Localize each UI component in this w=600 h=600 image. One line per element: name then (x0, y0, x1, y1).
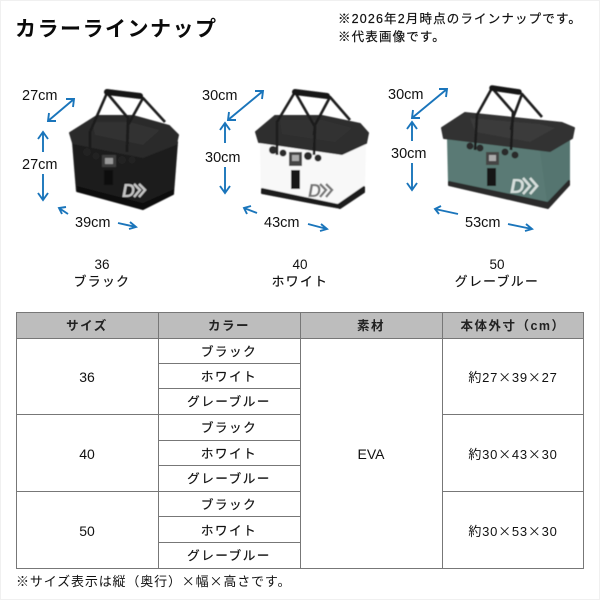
size column: 36 (79, 369, 95, 385)
bag: 50 grey-blue: D (510, 176, 524, 198)
dimension labels: 30cm (205, 150, 240, 166)
arrows: 36 dimensions (38, 99, 136, 229)
dimension labels: 27cm (22, 157, 57, 173)
dimensions column: 約30×53×30 (468, 521, 558, 540)
color column (187, 344, 271, 563)
color column: ホワイト (201, 447, 257, 461)
captions: 40 (292, 257, 308, 272)
color column: ブラック (201, 344, 257, 359)
arrows: 50 dimensions (407, 89, 532, 231)
captions: グレーブルー (455, 274, 539, 289)
color column: ホワイト (201, 370, 257, 384)
dimensions column (468, 367, 558, 540)
size column: 40 (79, 446, 95, 462)
bag: 40 white (256, 92, 368, 209)
color column: グレーブルー (187, 394, 271, 409)
notes (338, 12, 582, 44)
color column: ブラック (201, 497, 257, 512)
captions (74, 257, 539, 289)
dimension labels: 30cm (388, 87, 423, 103)
dimension labels: 30cm (202, 88, 237, 104)
notes: ※2026年2月時点のラインナップです。 (338, 12, 582, 26)
color column: ホワイト (201, 524, 257, 538)
bag: 40 white: D (308, 181, 321, 201)
color column: グレーブルー (187, 548, 271, 563)
table header row: 素材 (357, 318, 385, 333)
dimension labels: 43cm (264, 215, 299, 231)
captions: ホワイト (272, 274, 328, 289)
arrows: 40 dimensions (220, 91, 327, 231)
table header row (16, 312, 584, 338)
dimension labels: 27cm (22, 88, 57, 104)
material column: EVA (358, 446, 385, 462)
dimension labels (22, 87, 500, 231)
bag: 50 grey-blue (442, 88, 574, 208)
size column: 50 (79, 523, 95, 539)
notes: ※代表画像です。 (338, 30, 446, 44)
table header row: 本体外寸（cm） (460, 318, 566, 333)
title: カラーラインナップ (15, 18, 218, 41)
table header row: サイズ (66, 318, 108, 333)
dimensions column: 約30×43×30 (468, 444, 558, 463)
footnote: ※サイズ表示は縦（奥行）×幅×高さです。 (16, 571, 291, 590)
captions: 36 (94, 257, 110, 272)
table header row: カラー (208, 319, 250, 333)
table grid (16, 312, 584, 569)
dimensions column: 約27×39×27 (468, 367, 558, 386)
captions: ブラック (74, 274, 130, 289)
table (16, 312, 584, 569)
bag: 36 black: D (122, 181, 135, 201)
color column: グレーブルー (187, 471, 271, 486)
dimension labels: 39cm (75, 215, 110, 231)
dimension labels: 53cm (465, 215, 500, 231)
size column (79, 369, 95, 539)
color column: ブラック (201, 420, 257, 435)
bag: 36 black (70, 92, 178, 210)
captions: 50 (489, 257, 505, 272)
dimension labels: 30cm (391, 146, 426, 162)
